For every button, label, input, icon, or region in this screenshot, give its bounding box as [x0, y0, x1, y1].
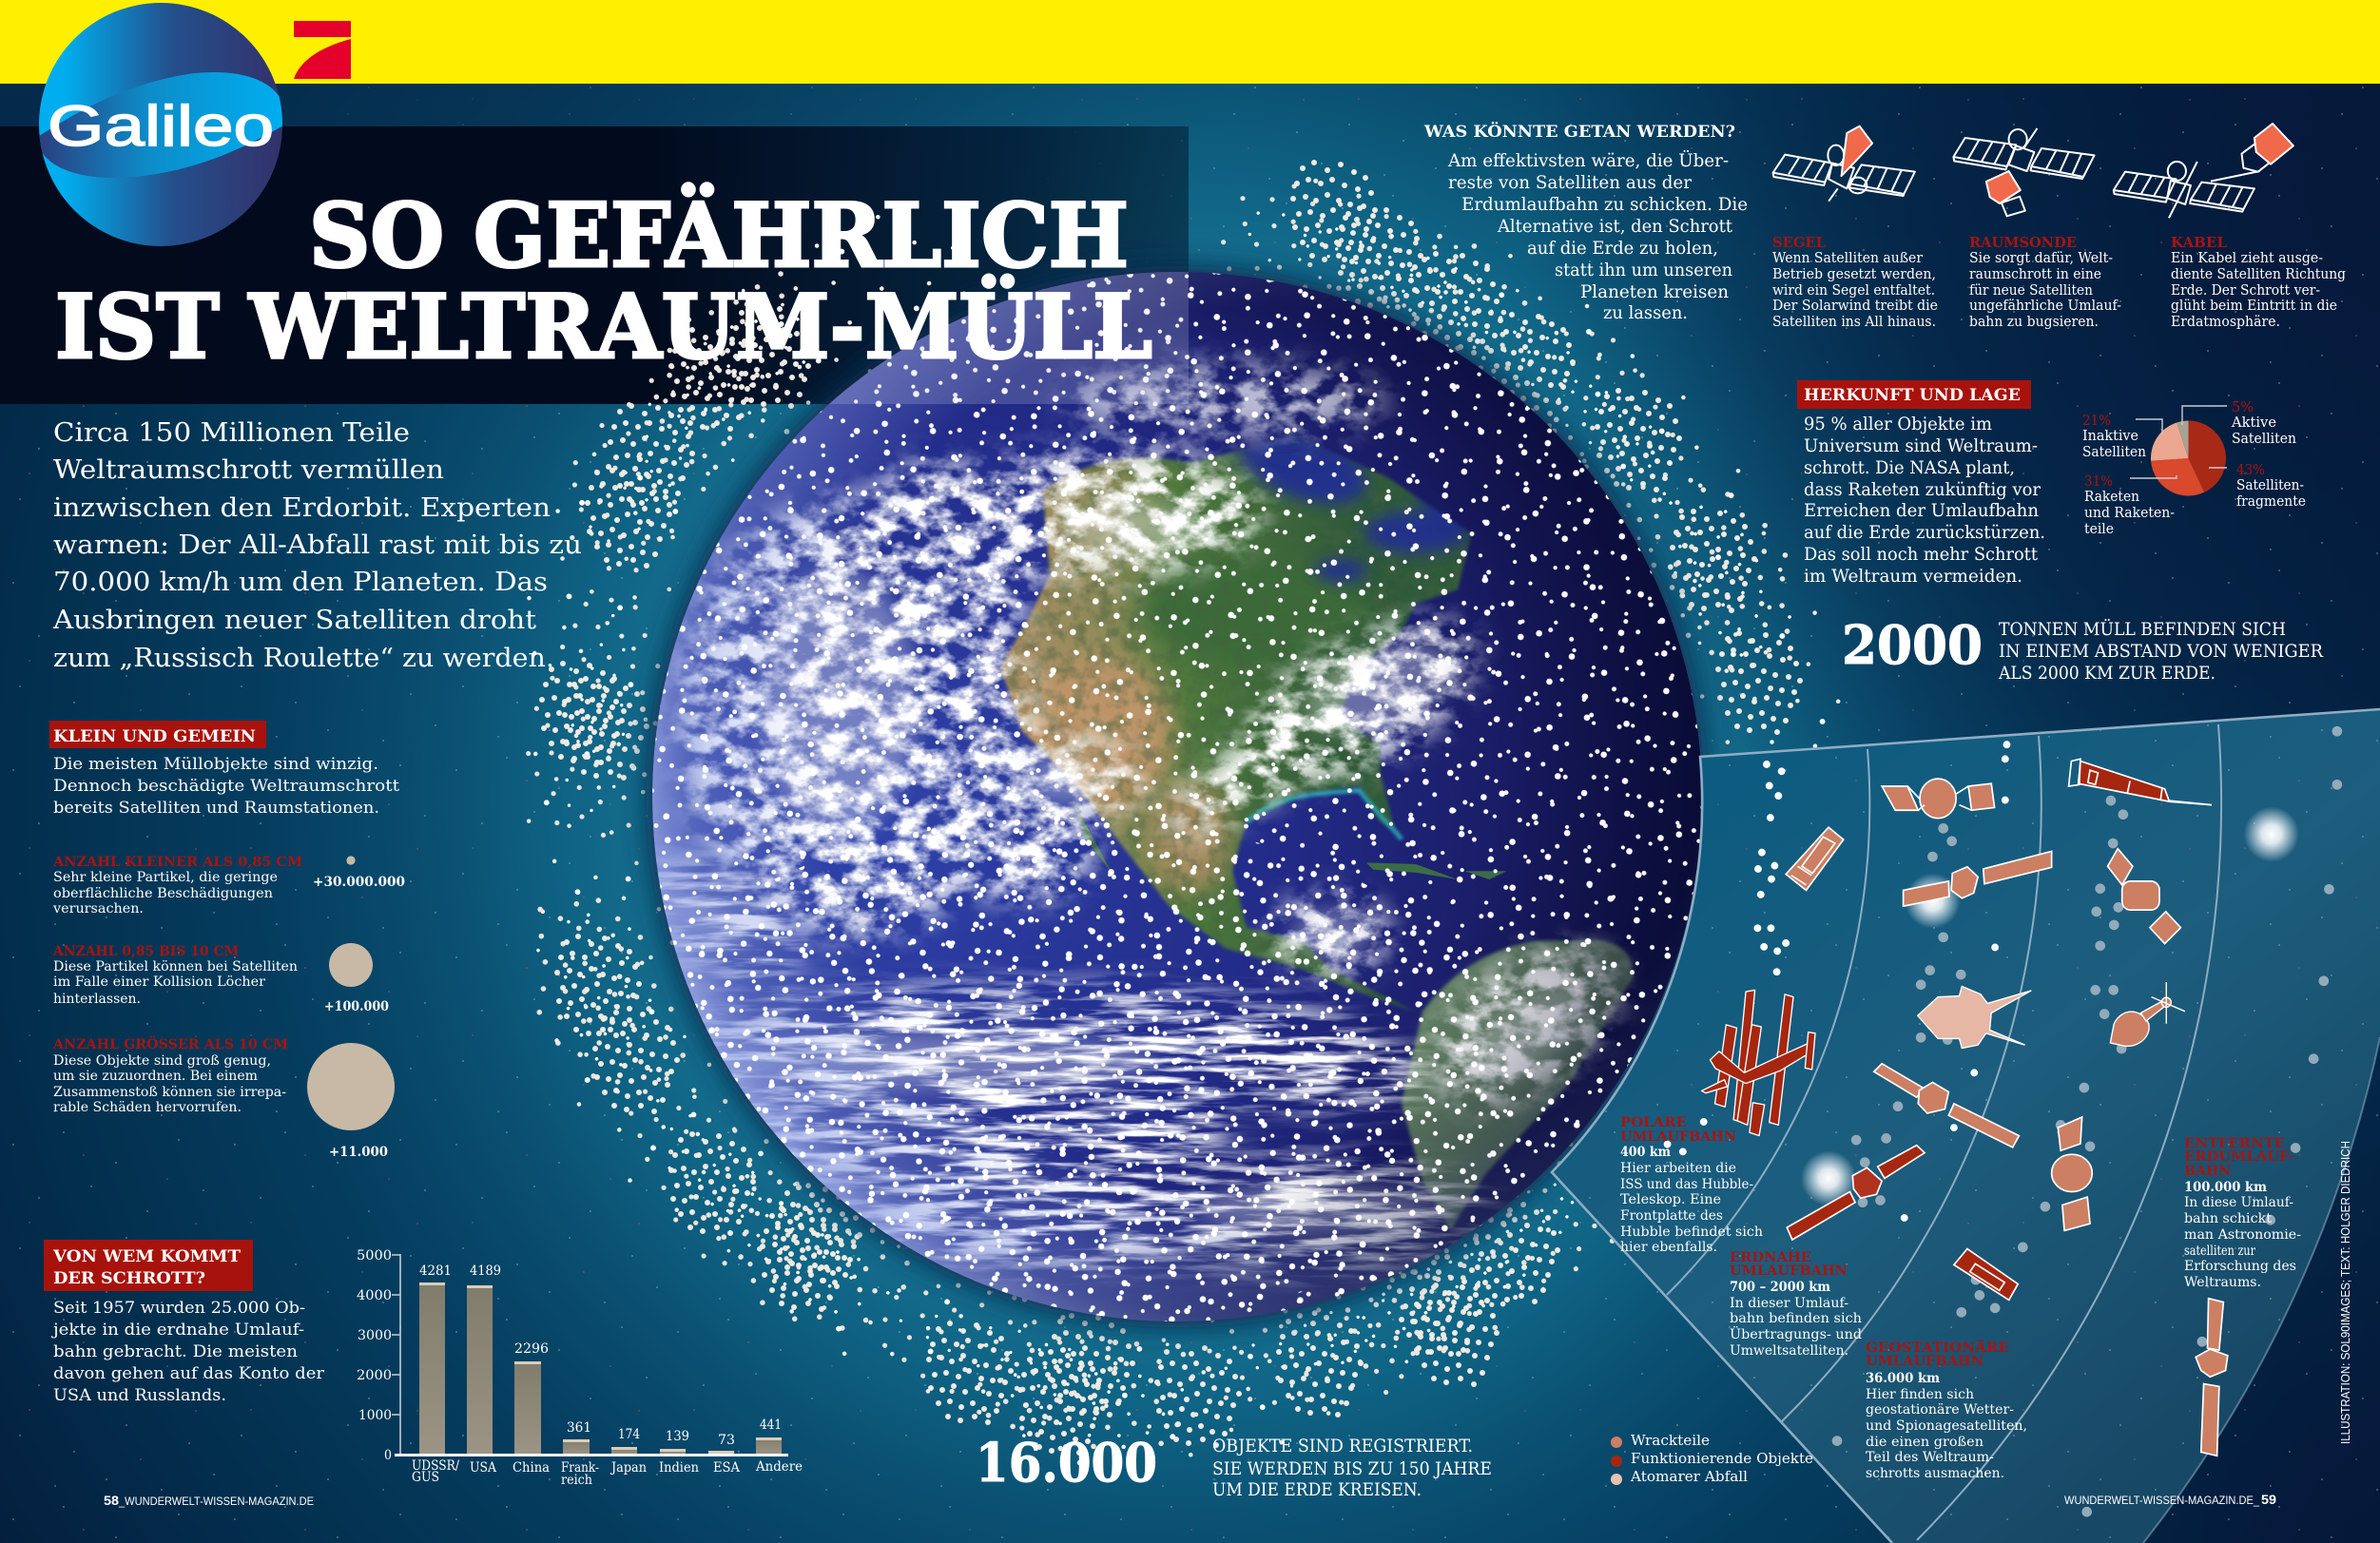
text: distant orbit: ERDUMLAUF-: [2184, 1149, 2294, 1165]
text: near earth orbit: 700 – 2000 km: [1730, 1280, 1830, 1295]
category labels: ESA: [713, 1460, 740, 1475]
value labels: 4281: [419, 1263, 452, 1279]
text columns: raumsonde: bahn zu bugsieren.: [1969, 315, 2099, 330]
value labels: 361: [567, 1420, 591, 1436]
panel: von wem kommt der schrott: [44, 1240, 325, 1405]
heading box: [44, 1240, 253, 1291]
paragraph: Seit 1957 wurden 25.000 Ob-: [53, 1299, 305, 1318]
pie labels: Inaktive: [2082, 429, 2138, 444]
wedge outline: [1552, 709, 2380, 1543]
cloud cover north and west: [647, 266, 1712, 1331]
debris: dark fragment: [1954, 1249, 2018, 1300]
heading: VON WEM KOMMT: [52, 1247, 241, 1266]
text columns: raumsonde: für neue Satelliten: [1969, 283, 2093, 299]
text columns: kabel: glüht beim Eintritt in die: [2171, 299, 2337, 314]
value labels: 4189: [470, 1263, 501, 1279]
size class small: oberflächliche Beschädigungen: [53, 886, 273, 901]
paragraph: [1447, 149, 1748, 323]
text: distant orbit: Erforschung des: [2184, 1259, 2296, 1274]
category labels: GUS: [412, 1470, 439, 1485]
slices: [2151, 420, 2226, 496]
size class large: Diese Objekte sind groß genug,: [53, 1053, 271, 1069]
pie labels: Satelliten: [2082, 445, 2146, 460]
icon: sail satellite: [1773, 126, 1915, 202]
legend: Wrackteile: [1631, 1434, 1710, 1449]
text columns: kabel: Erdatmosphäre.: [2171, 315, 2280, 330]
stat: 2000: ALS 2000 KM ZUR ERDE.: [1998, 663, 2216, 684]
text: geostationary orbit: die einen großen: [1866, 1435, 1983, 1450]
stat: 2000: TONNEN MÜLL BEFINDEN SICH: [1999, 618, 2286, 640]
pie labels: 31%: [2084, 474, 2113, 490]
paragraph: Universum sind Weltraum-: [1804, 436, 2038, 456]
logo: seven: [294, 21, 351, 79]
category labels: Andere: [755, 1459, 803, 1475]
paragraph: statt ihn um unseren: [1555, 260, 1732, 280]
bar caps: [419, 1283, 782, 1454]
title band veil over earth: [647, 266, 1189, 404]
lakes and northern ocean: [1232, 434, 1472, 591]
bar chart: [357, 1248, 803, 1488]
wedge objects: [1668, 731, 2337, 1512]
satellite: long panels: [1904, 851, 2052, 906]
yellow header bar: [0, 0, 2380, 84]
dense debris clusters: [542, 163, 1800, 1453]
text: geostationary orbit: Hier finden sich: [1866, 1387, 1974, 1402]
category labels: Japan: [610, 1460, 647, 1475]
size class small: verursachen.: [52, 901, 144, 916]
paragraph: [51, 1299, 325, 1405]
continent: south america: [1402, 939, 1634, 1230]
stat: 2000: 2000: [1842, 614, 1983, 677]
value labels: [419, 1263, 782, 1448]
text columns: raumsonde: raumschrott in eine: [1969, 267, 2101, 282]
panel: was könnte getan werden: [1423, 122, 1748, 323]
size class large: [52, 1036, 395, 1160]
paragraph: schrott. Die NASA plant,: [1804, 458, 2015, 478]
size class large: rable Schäden hervorrufen.: [53, 1100, 242, 1115]
text: polar orbit: Hier arbeiten die: [1620, 1161, 1736, 1176]
text: geostationary orbit: UMLAUFBAHN: [1866, 1354, 1983, 1369]
panel: orbit wedge: [1552, 709, 2380, 1543]
text columns: kabel: KABEL: [2171, 235, 2227, 251]
heading: [52, 1247, 241, 1288]
text columns: raumsonde: [1969, 235, 2121, 330]
size class small: ANZAHL KLEINER ALS 0,85 CM: [52, 855, 302, 870]
pie labels: 5%: [2232, 400, 2254, 415]
size class small: +30.000.000: [313, 875, 405, 890]
text: polar orbit: Hubble befindet sich: [1620, 1225, 1763, 1240]
size class small: Sehr kleine Partikel, die geringe: [53, 870, 278, 885]
text: geostationary orbit: geostationäre Wetter-: [1866, 1402, 2014, 1418]
paragraph: Alternative ist, den Schrott: [1497, 217, 1733, 237]
y labels: 5000: [357, 1248, 392, 1263]
heading: WAS KÖNNTE GETAN WERDEN?: [1423, 122, 1735, 142]
text: polar orbit: UMLAUFBAHN: [1620, 1129, 1736, 1145]
text columns: segel: wird ein Segel entfaltet.: [1772, 283, 1935, 299]
pie labels: 43%: [2236, 463, 2265, 478]
size class large: ANZAHL GRÖSSER ALS 10 CM: [52, 1036, 288, 1052]
heading: DER SCHROTT?: [53, 1269, 205, 1288]
size class large: +11.000: [329, 1145, 388, 1160]
footer left: 58: [104, 1493, 119, 1508]
size class large: Zusammenstoß können sie irrepa-: [53, 1085, 286, 1100]
y labels: 4000: [357, 1288, 392, 1303]
footer right: 59: [2261, 1492, 2276, 1507]
intro text: Circa 150 Millionen Teile: [53, 418, 410, 448]
thick cloud masses: [667, 500, 1604, 1233]
bars: [419, 1283, 782, 1455]
satellite: round body top: [1882, 779, 1995, 819]
text columns: raumsonde: RAUMSONDE: [1969, 235, 2077, 251]
earth globe: [618, 266, 1712, 1331]
intro text: Weltraumschrott vermüllen: [53, 455, 444, 485]
paragraph: im Weltraum vermeiden.: [1804, 567, 2022, 587]
glows: [1801, 806, 2299, 1206]
heading: HERKUNFT UND LAGE: [1804, 386, 2021, 405]
paragraph: jekte in die erdnahe Umlauf-: [51, 1321, 304, 1340]
text: near earth orbit: [1730, 1250, 1862, 1359]
size class medium: +100.000: [324, 999, 389, 1014]
text columns: kabel: [2171, 235, 2346, 330]
text: near earth orbit: In dieser Umlauf-: [1730, 1296, 1848, 1311]
text columns: segel: Wenn Satelliten außer: [1772, 251, 1923, 266]
pie labels: [2082, 400, 2306, 537]
intro text: Ausbringen neuer Satelliten droht: [52, 606, 536, 635]
text columns: kabel: Ein Kabel zieht ausge-: [2171, 251, 2323, 266]
y labels: 0: [384, 1448, 392, 1463]
stat: 16.000: OBJEKTE SIND REGISTRIERT.: [1212, 1436, 1473, 1456]
white debris dots: [1668, 744, 2006, 1218]
text: geostationary orbit: Teil des Weltraum-: [1866, 1450, 1994, 1465]
text: distant orbit: In diese Umlauf-: [2184, 1195, 2293, 1210]
text: distant orbit: bahn schickt: [2184, 1211, 2273, 1226]
limb light and shade: [652, 272, 1702, 1321]
pie chart: [2082, 400, 2306, 537]
ISS station: [1701, 990, 1815, 1136]
legend: Funktionierende Objekte: [1631, 1452, 1813, 1467]
paragraph: davon gehen auf das Konto der: [53, 1364, 325, 1383]
text columns: segel: Satelliten ins All hinaus.: [1772, 315, 1936, 330]
orbital debris ring: [501, 161, 1857, 1476]
text: geostationary orbit: und Spionagesatelliten,: [1866, 1418, 2027, 1434]
paragraph: reste von Satelliten aus der: [1448, 173, 1692, 193]
dark title band: [0, 126, 1189, 404]
pie labels: und Raketen-: [2084, 506, 2175, 521]
intro paragraph: Die meisten Müllobjekte sind winzig.: [53, 755, 378, 774]
value labels: 174: [618, 1427, 640, 1442]
paragraph: USA und Russlands.: [53, 1386, 226, 1405]
size class medium: [52, 943, 389, 1014]
text: near earth orbit: ERDNAHE: [1730, 1250, 1811, 1265]
stat: 16.000: [976, 1432, 1492, 1500]
text: polar orbit: POLARE: [1620, 1115, 1687, 1130]
text: geostationary orbit: 36.000 km: [1866, 1371, 1940, 1386]
intro text: warnen: Der All-Abfall rast mit bis zu: [53, 530, 582, 560]
ocean: [652, 272, 1702, 1321]
stat: 16.000: UM DIE ERDE KREISEN.: [1212, 1479, 1422, 1500]
icon: cable satellite: [2114, 124, 2293, 218]
text: near earth orbit: UMLAUFBAHN: [1730, 1263, 1848, 1279]
pie labels: Aktive: [2231, 415, 2276, 431]
text: geostationary orbit: [1866, 1340, 2027, 1481]
balloon probe: [2110, 982, 2185, 1046]
cloud cover south: [647, 266, 1712, 1331]
paragraph: Erdumlaufbahn zu schicken. Die: [1461, 195, 1748, 215]
value labels: 139: [666, 1429, 689, 1444]
intro paragraph: [53, 755, 399, 818]
category labels: reich: [561, 1473, 592, 1488]
intro paragraph: bereits Satelliten und Raumstationen.: [53, 799, 379, 818]
satellite: dark panels: [1787, 1146, 1925, 1240]
paragraph: 95 % aller Objekte im: [1804, 415, 1992, 434]
turquoise shelf: [1247, 790, 1402, 839]
text: distant orbit: BAHN: [2184, 1164, 2231, 1179]
stat: 2000: IN EINEM ABSTAND VON WENIGER: [1999, 641, 2324, 662]
stat: 16.000: 16.000: [976, 1432, 1157, 1495]
text: near earth orbit: bahn befinden sich: [1730, 1311, 1862, 1326]
paragraph: auf die Erde zu holen,: [1527, 239, 1718, 259]
text columns: raumsonde: ungefährliche Umlauf-: [1969, 299, 2121, 314]
heading box: [1797, 380, 2031, 409]
rocket: [2069, 759, 2212, 805]
paragraph: zu lassen.: [1603, 303, 1688, 323]
icons: satellites: [1773, 124, 2293, 218]
text: distant orbit: 100.000 km: [2184, 1180, 2267, 1195]
logo: galileo: Galileo: [48, 94, 274, 158]
right side shade: [1426, 84, 2380, 1543]
y labels: 1000: [358, 1408, 392, 1423]
value labels: 441: [760, 1418, 782, 1433]
intro text: [52, 418, 582, 673]
text: near earth orbit: Umweltsatelliten.: [1730, 1343, 1848, 1359]
stat: 16.000: SIE WERDEN BIS ZU 150 JAHRE: [1212, 1458, 1492, 1479]
intro text: inzwischen den Erdorbit. Experten: [53, 493, 551, 523]
title: [55, 183, 1152, 378]
debris dots over earth: [618, 272, 1702, 1331]
text columns: segel: SEGEL: [1772, 235, 1826, 251]
wedge background: [1552, 709, 2380, 1543]
wedge stars: [1552, 709, 2380, 1543]
size class medium: im Falle einer Kollision Löcher: [53, 974, 266, 990]
satellite: diagonal: [1874, 1064, 2019, 1148]
heading box: [49, 721, 266, 748]
size class medium: Diese Partikel können bei Satelliten: [53, 959, 298, 974]
size class large: um sie zuzuordnen. Bei einem: [53, 1069, 258, 1084]
text columns: kabel: Erde. Der Schrott ver-: [2171, 283, 2320, 299]
size class small: [52, 855, 405, 916]
size class medium: ANZAHL 0,85 BIS 10 CM: [52, 944, 239, 959]
satellite: right cylinder: [2108, 849, 2180, 944]
text columns: kabel: diente Satelliten Richtung: [2171, 267, 2346, 282]
heading: KLEIN UND GEMEIN: [53, 727, 256, 746]
text: distant orbit: ENTFERNTE: [2184, 1136, 2285, 1151]
text: polar orbit: [1620, 1115, 1763, 1255]
footer left: _WUNDERWELT-WISSEN-MAGAZIN.DE: [118, 1495, 314, 1508]
text: polar orbit: ISS und das Hubble-: [1620, 1177, 1753, 1192]
text columns: segel: Betrieb gesetzt werden,: [1772, 267, 1936, 282]
text columns: raumsonde: Sie sorgt dafür, Welt-: [1969, 251, 2113, 266]
atomic waste craft: [1918, 986, 2031, 1049]
pie labels: fragmente: [2236, 494, 2306, 510]
gulf islands: [1073, 800, 1507, 879]
category labels: China: [513, 1460, 550, 1475]
size class medium: hinterlassen.: [53, 992, 141, 1007]
leader lines: [2130, 406, 2227, 478]
value labels: 2296: [514, 1341, 549, 1357]
icon: probe satellite: [1953, 128, 2095, 216]
text: geostationary orbit: GEOSTATIONÄRE: [1866, 1340, 2009, 1356]
y labels: 2000: [357, 1368, 392, 1383]
orbit arcs: [1667, 724, 2380, 1543]
category labels: [412, 1458, 803, 1488]
earth halo: [647, 266, 1708, 1327]
intro paragraph: Dennoch beschädigte Weltraumschrott: [53, 777, 399, 796]
baseline: [395, 1454, 788, 1456]
pie labels: teile: [2084, 522, 2114, 537]
text: distant orbit: [2184, 1136, 2301, 1290]
debris: small satellite upper left: [1786, 827, 1844, 890]
satellite: far orbit: [2196, 1299, 2228, 1456]
bottom corner shade: [1807, 1008, 2380, 1543]
paragraph: bahn gebracht. Die meisten: [53, 1342, 298, 1361]
text: near earth orbit: Übertragungs- und: [1730, 1326, 1862, 1342]
paragraph: Erreichen der Umlaufbahn: [1804, 501, 2039, 521]
text columns: segel: Der Solarwind treibt die: [1772, 299, 1938, 314]
axes: [392, 1254, 400, 1455]
text: geostationary orbit: schrotts ausmachen.: [1866, 1466, 2004, 1481]
category labels: Indien: [659, 1460, 699, 1475]
text: distant orbit: Weltraums.: [2184, 1275, 2261, 1290]
credit line: ILLUSTRATION: SOL90IMAGES; TEXT: HOLGER DIEDRICH: [2339, 1141, 2352, 1444]
logo: galileo: [36, 3, 285, 246]
satellite: right lower: [2052, 1117, 2092, 1230]
panel: herkunft und lage: [1797, 380, 2045, 587]
stat: 2000: [1842, 614, 2324, 684]
pie labels: Raketen: [2084, 490, 2139, 505]
paragraph: Planeten kreisen: [1580, 282, 1729, 302]
paragraph: dass Raketen zukünftig vor: [1804, 480, 2041, 500]
category labels: Frank-: [561, 1460, 599, 1475]
text: polar orbit: Frontplatte des: [1620, 1208, 1723, 1224]
y labels: 3000: [358, 1328, 392, 1343]
upper dark strip: [0, 84, 1236, 126]
paragraph: auf die Erde zurückstürzen.: [1804, 523, 2045, 543]
text: polar orbit: hier ebenfalls.: [1620, 1240, 1717, 1255]
intro text: zum „Russisch Roulette“ zu werden.: [53, 644, 554, 673]
continent: north america: [998, 435, 1472, 1011]
y labels: [357, 1248, 392, 1463]
text: distant orbit: satelliten zur: [2184, 1244, 2255, 1259]
title: SO GEFÄHRLICH: [309, 183, 1129, 287]
intro text: 70.000 km/h um den Planeten. Das: [53, 568, 548, 597]
text: polar orbit: Teleskop. Eine: [1620, 1192, 1721, 1207]
text: distant orbit: man Astronomie-: [2184, 1227, 2301, 1243]
text: polar orbit: 400 km: [1620, 1145, 1671, 1160]
paragraph: Das soll noch mehr Schrott: [1804, 545, 2039, 565]
pie labels: Satelliten-: [2236, 478, 2304, 493]
category labels: USA: [470, 1460, 496, 1475]
footer right: WUNDERWELT-WISSEN-MAGAZIN.DE_: [2064, 1494, 2259, 1507]
value labels: 73: [718, 1433, 735, 1448]
category labels: UDSSR/: [412, 1458, 459, 1474]
grey debris dots: [1837, 731, 2337, 1512]
text columns: segel: [1772, 235, 1938, 330]
panel: klein und gemein: [49, 721, 405, 1160]
pie labels: 21%: [2082, 414, 2111, 429]
legend: Atomarer Abfall: [1630, 1470, 1748, 1485]
title: IST WELTRAUM-MÜLL: [55, 273, 1152, 378]
pie labels: Satelliten: [2232, 432, 2296, 447]
legend: [1611, 1434, 1813, 1485]
paragraph: Am effektivsten wäre, die Über-: [1447, 149, 1729, 171]
paragraph: [1804, 415, 2045, 587]
